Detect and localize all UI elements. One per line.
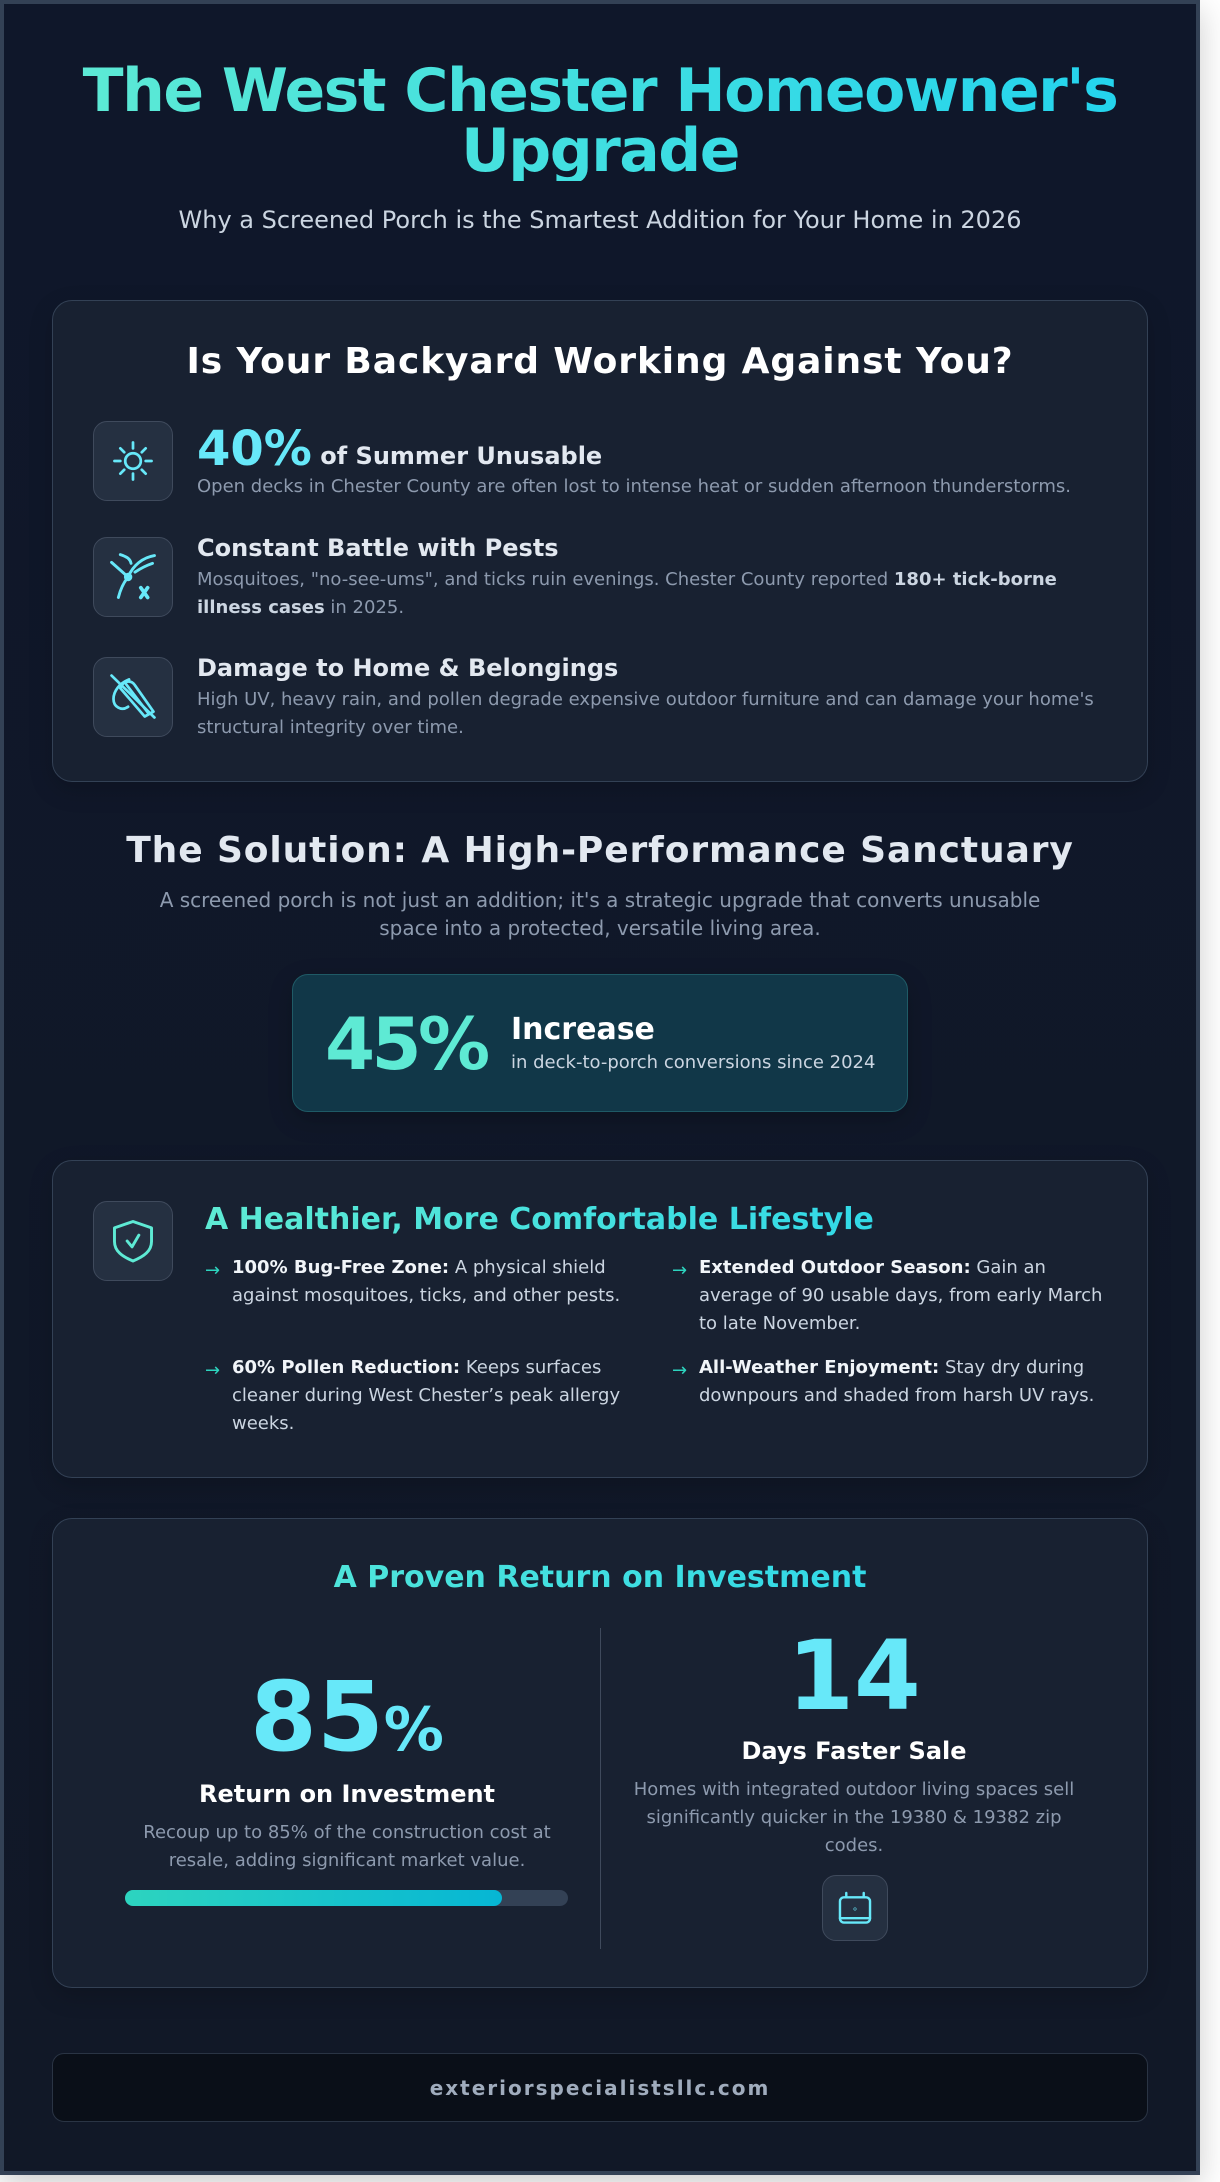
problem: pests [197, 534, 1057, 618]
heading: solution: The Solution: A High-Performance Sanctuary [126, 830, 1074, 871]
panel: return on investment [52, 1518, 1148, 1988]
text: pollen: weeks. [232, 1413, 294, 1434]
subtitle: Why a Screened Porch is the Smartest Addition for Your Home in 2026 [179, 206, 1021, 234]
column: 14 days [634, 1620, 1074, 1941]
text: solution intro: A screened porch is not just an addition; it's a strategic upgrade that converts unusable [160, 888, 1040, 912]
benefit: season [672, 1257, 1102, 1334]
description: days faster [634, 1779, 1074, 1856]
callout: 45% increase [292, 974, 908, 1112]
title: Upgrade [461, 116, 739, 186]
text: season: to late November. [699, 1313, 860, 1334]
text: all-weather [699, 1357, 1094, 1406]
problem: summer unusable [197, 421, 1071, 497]
benefit: pollen [205, 1357, 620, 1434]
footer [52, 2053, 1148, 2122]
column: 85% ROI [125, 1661, 568, 1906]
heading: ROI [53, 1559, 1147, 1597]
description: damage: High UV, heavy rain, and pollen degrade expensive outdoor furniture and can damage your home's [197, 689, 1094, 710]
icon: calendar [822, 1875, 888, 1941]
benefit: all-weather [672, 1357, 1094, 1406]
stat: 85%: 85% [250, 1661, 444, 1773]
heading: pests: Constant Battle with Pests [197, 534, 559, 562]
benefit: bug-free [205, 1257, 620, 1306]
heading: lifestyle: A Healthier, More Comfortable Lifestyle [205, 1202, 874, 1237]
text: season [699, 1257, 1102, 1334]
label: days faster: Days Faster Sale [741, 1737, 967, 1765]
text: solution intro: space into a protected, versatile living area. [379, 916, 821, 940]
text: bug-free [232, 1257, 620, 1306]
stat: 14: 14 [787, 1620, 921, 1732]
text: pollen [232, 1357, 620, 1434]
description: ROI: Recoup up to 85% of the construction cost at [143, 1822, 551, 1843]
description: pests [197, 569, 1057, 618]
problem: damage [197, 654, 1094, 738]
text: solution intro [160, 888, 1040, 940]
arrow: → [205, 1360, 220, 1381]
panel: backyard problems [52, 300, 1148, 782]
heading: ROI: A Proven Return on Investment [334, 1560, 866, 1595]
stat: 45%: 45% [325, 1002, 487, 1086]
heading: backyard: Is Your Backyard Working Against You? [186, 341, 1014, 382]
text: all-weather: All-Weather Enjoyment: Stay dry during [699, 1357, 1084, 1378]
text: pollen: cleaner during West Chester’s peak allergy [232, 1385, 620, 1406]
description: pests: illness cases in 2025. [197, 597, 404, 618]
arrow: → [205, 1260, 220, 1281]
text: all-weather: downpours and shaded from harsh UV rays. [699, 1385, 1094, 1406]
description: days faster: significantly quicker in the 19380 & 19382 zip [646, 1807, 1062, 1828]
text: bug-free: 100% Bug-Free Zone: A physical shield [232, 1257, 606, 1278]
progress bar [125, 1890, 568, 1906]
arrow: → [672, 1260, 687, 1281]
heading: damage: Damage to Home & Belongings [197, 654, 618, 682]
text: season: average of 90 usable days, from early March [699, 1285, 1102, 1306]
stat heading: 40%: 40% of Summer Unusable [197, 421, 602, 477]
panel: lifestyle [52, 1160, 1148, 1478]
progress fill [125, 1890, 502, 1906]
description: summer: Open decks in Chester County are often lost to intense heat or sudden afternoon thunderstorms. [197, 476, 1071, 497]
icon: sun [93, 421, 173, 501]
icon: shield [93, 1201, 173, 1281]
text: season: Extended Outdoor Season: Gain an [699, 1257, 1046, 1278]
sublabel: conversions: in deck-to-porch conversions since 2024 [511, 1052, 875, 1073]
text: pollen: 60% Pollen Reduction: Keeps surfaces [232, 1357, 601, 1378]
label: ROI: Return on Investment [199, 1780, 495, 1808]
description: ROI: resale, adding significant market value. [169, 1850, 525, 1871]
description: damage [197, 689, 1094, 738]
title: The West Chester Homeowner's [83, 56, 1117, 126]
heading: lifestyle [205, 1201, 1105, 1239]
divider [600, 1628, 601, 1949]
arrow: → [672, 1360, 687, 1381]
description: pests: Mosquitoes, "no-see-ums", and ticks ruin evenings. Chester County reported 180+ tick-borne [197, 569, 1057, 590]
description: days faster: codes. [825, 1835, 883, 1856]
description: ROI [143, 1822, 551, 1871]
text: bug-free: against mosquitoes, ticks, and other pests. [232, 1285, 620, 1306]
icon: mosquito [93, 537, 173, 617]
icon: damage [93, 657, 173, 737]
description: damage: structural integrity over time. [197, 717, 464, 738]
title [52, 61, 1148, 181]
description: days faster: Homes with integrated outdoor living spaces sell [634, 1779, 1074, 1800]
label: increase: Increase [511, 1012, 655, 1047]
footer text: website: exteriorspecialistsllc.com [430, 2076, 770, 2100]
